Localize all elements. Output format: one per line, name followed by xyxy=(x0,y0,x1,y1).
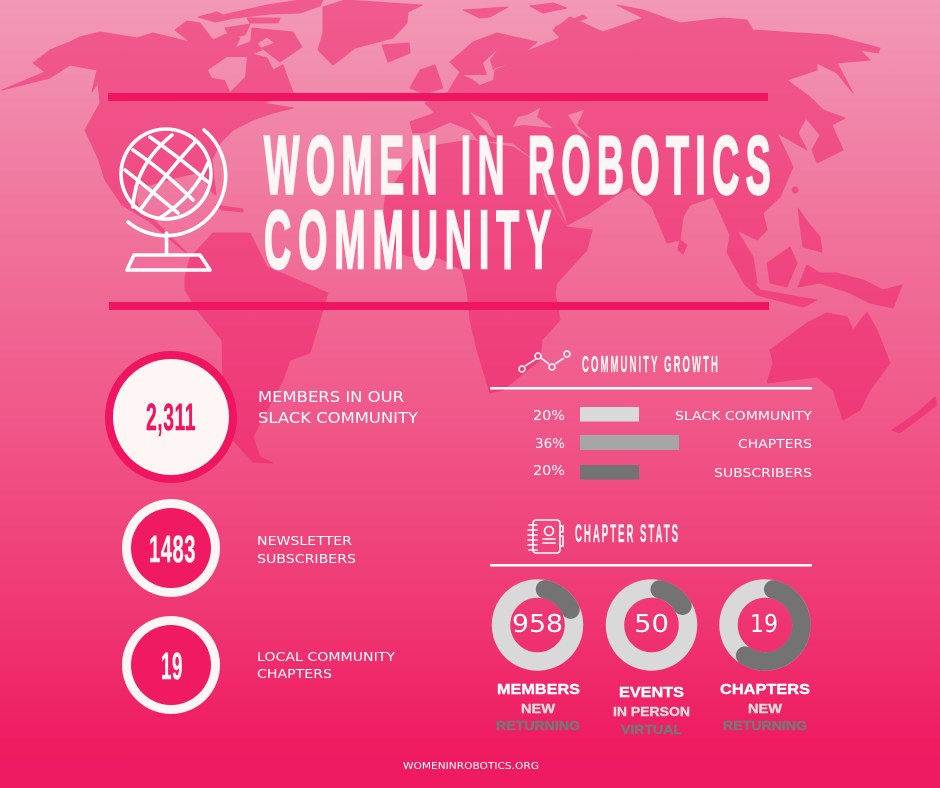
map: greenland xyxy=(318,0,422,65)
map: borneo xyxy=(767,247,797,287)
footer url: WOMENINROBOTICS.ORG xyxy=(403,761,539,772)
donut: events: VIRTUAL xyxy=(621,723,682,737)
sea: red sea xyxy=(540,165,567,225)
stat: slack members: MEMBERS IN OUR xyxy=(258,389,404,406)
donut: members: RETURNING xyxy=(496,719,580,733)
map: eurasia xyxy=(410,5,880,285)
map: sri lanka xyxy=(678,240,687,254)
map: new zealand xyxy=(892,397,937,433)
donut: chapters: 19 xyxy=(750,609,778,638)
panel: community growth xyxy=(490,351,813,480)
icon: notebook xyxy=(528,520,563,553)
map: south america xyxy=(185,233,328,463)
stat: local chapters: CHAPTERS xyxy=(257,667,332,681)
panel: community growth: COMMUNITY GROWTH xyxy=(582,351,720,377)
stat: newsletter subscribers: SUBSCRIBERS xyxy=(257,552,356,566)
donut: members: 958 xyxy=(512,609,563,638)
stat: slack members: SLACK COMMUNITY xyxy=(258,410,418,427)
donut: events xyxy=(613,588,690,737)
stat: local chapters: 19 xyxy=(161,646,183,688)
donut: chapters xyxy=(720,588,810,733)
bar chart: SUBSCRIBERS xyxy=(714,466,812,480)
donut: members xyxy=(496,588,580,733)
stat: newsletter subscribers xyxy=(126,504,356,592)
stat: newsletter subscribers: 1483 xyxy=(149,529,196,571)
panel: chapter stats xyxy=(490,520,812,737)
icon: globe xyxy=(121,129,226,270)
map: philippines xyxy=(798,208,822,252)
map: uk and ireland xyxy=(410,65,443,94)
stat: newsletter subscribers: NEWSLETTER xyxy=(257,534,352,548)
donut: events: EVENTS xyxy=(619,684,684,701)
map: new guinea xyxy=(798,265,902,308)
sea: baltic xyxy=(463,50,507,85)
bar chart: 20% xyxy=(533,464,565,479)
donut: members: NEW xyxy=(521,702,555,716)
bar chart: 36% xyxy=(535,437,565,452)
map: svalbard and franz josef xyxy=(463,3,567,18)
bar chart: SLACK COMMUNITY xyxy=(675,409,813,423)
title: COMMUNITY xyxy=(264,193,558,286)
panel: chapter stats: CHAPTER STATS xyxy=(575,520,680,548)
donut: events: 50 xyxy=(634,609,669,638)
donut: chapters: NEW xyxy=(748,702,782,716)
bar chart: 20% xyxy=(533,409,565,424)
donut: chapters: CHAPTERS xyxy=(720,681,810,698)
map: australia xyxy=(767,312,890,420)
map: africa xyxy=(383,140,592,393)
icon: line chart xyxy=(519,351,570,372)
map: sumatra and java xyxy=(727,252,817,307)
sea: caspian xyxy=(568,110,593,140)
stat: slack members: 2,311 xyxy=(146,397,196,439)
map: novaya zemlya xyxy=(555,15,587,35)
bottom rule xyxy=(109,302,769,310)
map: arctic islands xyxy=(198,0,323,62)
donut: events: IN PERSON xyxy=(613,705,690,719)
inland seas xyxy=(208,50,593,225)
world map xyxy=(2,0,937,463)
sea: hudson bay xyxy=(208,57,247,92)
stat: slack members xyxy=(109,355,418,479)
stat: local chapters xyxy=(126,620,396,710)
map: taiwan xyxy=(792,187,798,193)
bar chart xyxy=(533,407,813,480)
map: cuba xyxy=(215,205,243,212)
sea: black sea xyxy=(513,108,553,128)
stat: local chapters: LOCAL COMMUNITY xyxy=(257,650,396,664)
sea: adriatic xyxy=(470,112,496,138)
top rule xyxy=(108,93,768,101)
map: north america xyxy=(2,21,293,253)
title xyxy=(264,118,777,286)
map: iceland xyxy=(382,43,410,62)
donut: chapters: RETURNING xyxy=(723,719,807,733)
bar chart: CHAPTERS xyxy=(738,437,812,451)
donut: members: MEMBERS xyxy=(497,681,580,698)
